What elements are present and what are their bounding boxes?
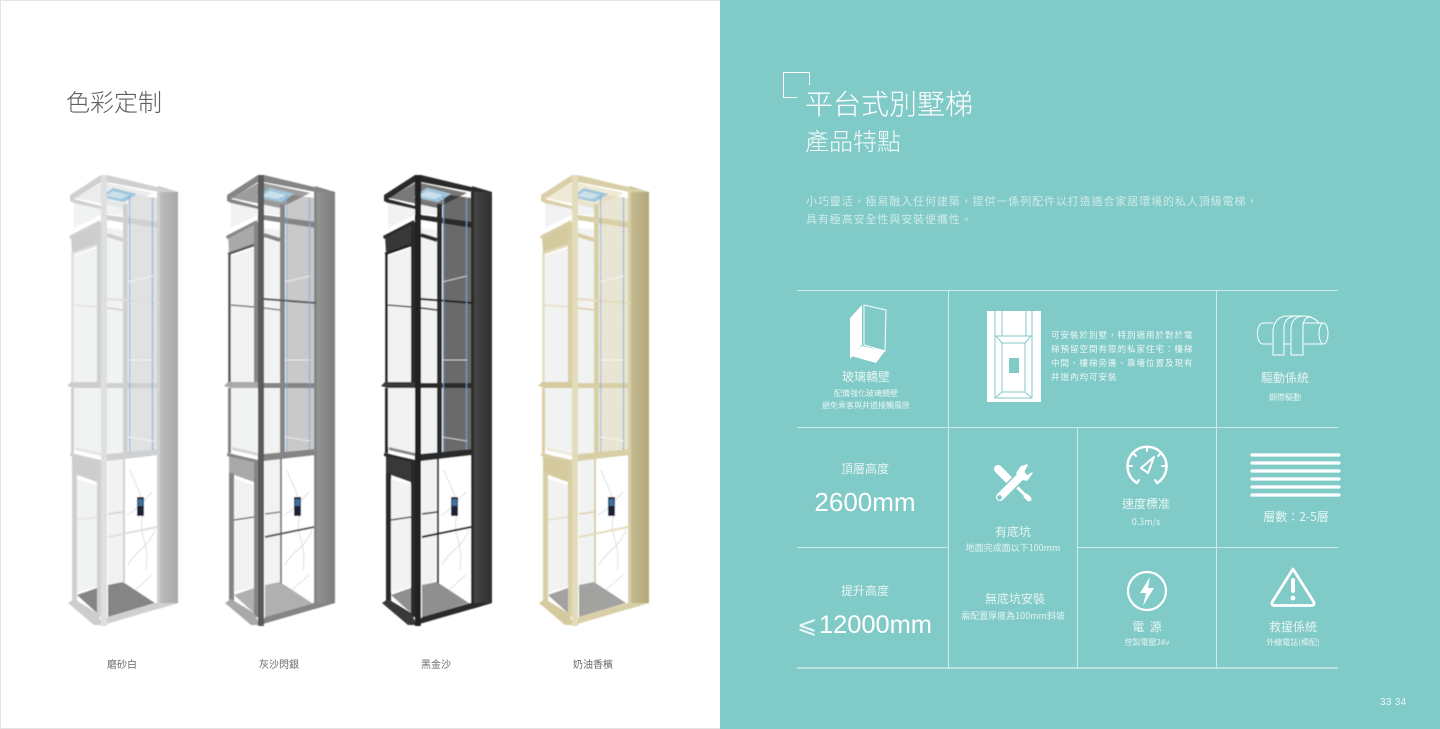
icon: belt drive bbox=[1258, 316, 1328, 355]
intro text: 具有極高安全性與安裝便攜性。 bbox=[806, 212, 973, 226]
note: external phone line: 外線電話(標配) bbox=[1266, 637, 1320, 648]
label: speed standard: 速度標准 bbox=[1122, 495, 1170, 512]
note: tempered glass: 配備強化玻璃轎壁 bbox=[834, 388, 898, 398]
feature grid lines bbox=[797, 290, 1338, 668]
note: tempered glass: 避免乘客與井道接觸風險 bbox=[822, 400, 910, 410]
cell: rescue system bbox=[1266, 569, 1320, 648]
elevator: champagne bbox=[538, 175, 649, 626]
caption: champagne: 奶油香檳 bbox=[573, 656, 613, 671]
caption: frosted white: 磨砂白 bbox=[107, 656, 137, 671]
page numbers: 33 34 bbox=[1380, 697, 1407, 708]
value: 2600mm: 2600mm bbox=[814, 487, 916, 517]
cell: pit options bbox=[961, 465, 1065, 622]
text: installation description: 井道內均可安裝 bbox=[1051, 372, 1118, 382]
cell: floors bbox=[1252, 455, 1339, 525]
icon: shaft plan bbox=[987, 311, 1041, 402]
label: floors: 層數：2-5層 bbox=[1263, 508, 1329, 525]
subtitle: product features: 產品特點 bbox=[805, 122, 901, 157]
note: ramp thickness: 需配置厚度為100mm斜坡 bbox=[961, 609, 1065, 622]
cell: speed bbox=[1122, 447, 1170, 528]
text: installation description: 梯預留空間有限的私家住宅：樓梯 bbox=[1051, 344, 1194, 354]
icon: warning triangle bbox=[1272, 569, 1314, 606]
elevator: grey silver bbox=[224, 175, 335, 626]
caption: black: 黑金沙 bbox=[421, 656, 451, 671]
note: pit depth: 地面完成面以下100mm bbox=[966, 541, 1060, 554]
note: speed value: 0.3m/s bbox=[1132, 515, 1160, 528]
cell: power bbox=[1124, 572, 1170, 648]
heading: colour customisation: 色彩定制 bbox=[66, 83, 162, 118]
cell: travel height bbox=[797, 582, 932, 639]
label: travel height: 提升高度 bbox=[841, 582, 889, 599]
cell: glass walls bbox=[822, 305, 910, 410]
cell: installation bbox=[987, 311, 1194, 402]
icon: speedometer bbox=[1128, 447, 1166, 483]
cell: drive system bbox=[1258, 316, 1328, 403]
cell: headroom bbox=[814, 460, 916, 517]
title bracket bbox=[784, 72, 810, 98]
title: platform villa elevator: 平台式別墅梯 bbox=[805, 83, 973, 123]
panel: white colour page bbox=[0, 0, 720, 729]
value: 12000mm: 12000mm bbox=[819, 611, 932, 639]
label: glass walls: 玻璃轎壁 bbox=[842, 368, 890, 385]
panel: teal features page bbox=[720, 0, 1440, 729]
intro text bbox=[806, 194, 1258, 226]
label: with pit: 有底坑 bbox=[995, 523, 1031, 540]
label: pitless install: 無底坑安裝 bbox=[985, 590, 1045, 607]
value: 12000mm: ⩽ bbox=[797, 611, 817, 639]
page edge line bbox=[0, 0, 720, 728]
elevator: black bbox=[381, 175, 492, 626]
text: installation description: 中間、樓梯旁邊、靠墻位置及現有 bbox=[1051, 358, 1194, 368]
icon: floor lines bbox=[1252, 455, 1339, 495]
label: rescue system: 救援係統 bbox=[1269, 618, 1317, 635]
icon: glass cube bbox=[850, 305, 886, 363]
label: drive system: 驅動係統 bbox=[1261, 369, 1309, 386]
label: power: 電 源 bbox=[1132, 618, 1162, 635]
label: headroom: 頂層高度 bbox=[841, 460, 889, 477]
text: installation description: 可安裝於別墅，特別適用於對於電 bbox=[1051, 330, 1194, 340]
icon: lightning in circle bbox=[1128, 572, 1166, 610]
note: steel belt drive: 鋼帶驅動 bbox=[1269, 392, 1301, 403]
note: tempered glass bbox=[822, 388, 910, 410]
icon: tools bbox=[998, 465, 1032, 499]
elevator: frosted white bbox=[67, 175, 178, 626]
intro text: 小巧靈活，極易融入任何建築，提供一係列配件以打造適合家居環境的私人頂級電梯， bbox=[806, 194, 1258, 208]
note: control voltage: 控製電壓24v bbox=[1124, 637, 1170, 648]
caption: grey silver: 灰沙閃銀 bbox=[259, 656, 299, 671]
text: installation description bbox=[1051, 330, 1194, 382]
